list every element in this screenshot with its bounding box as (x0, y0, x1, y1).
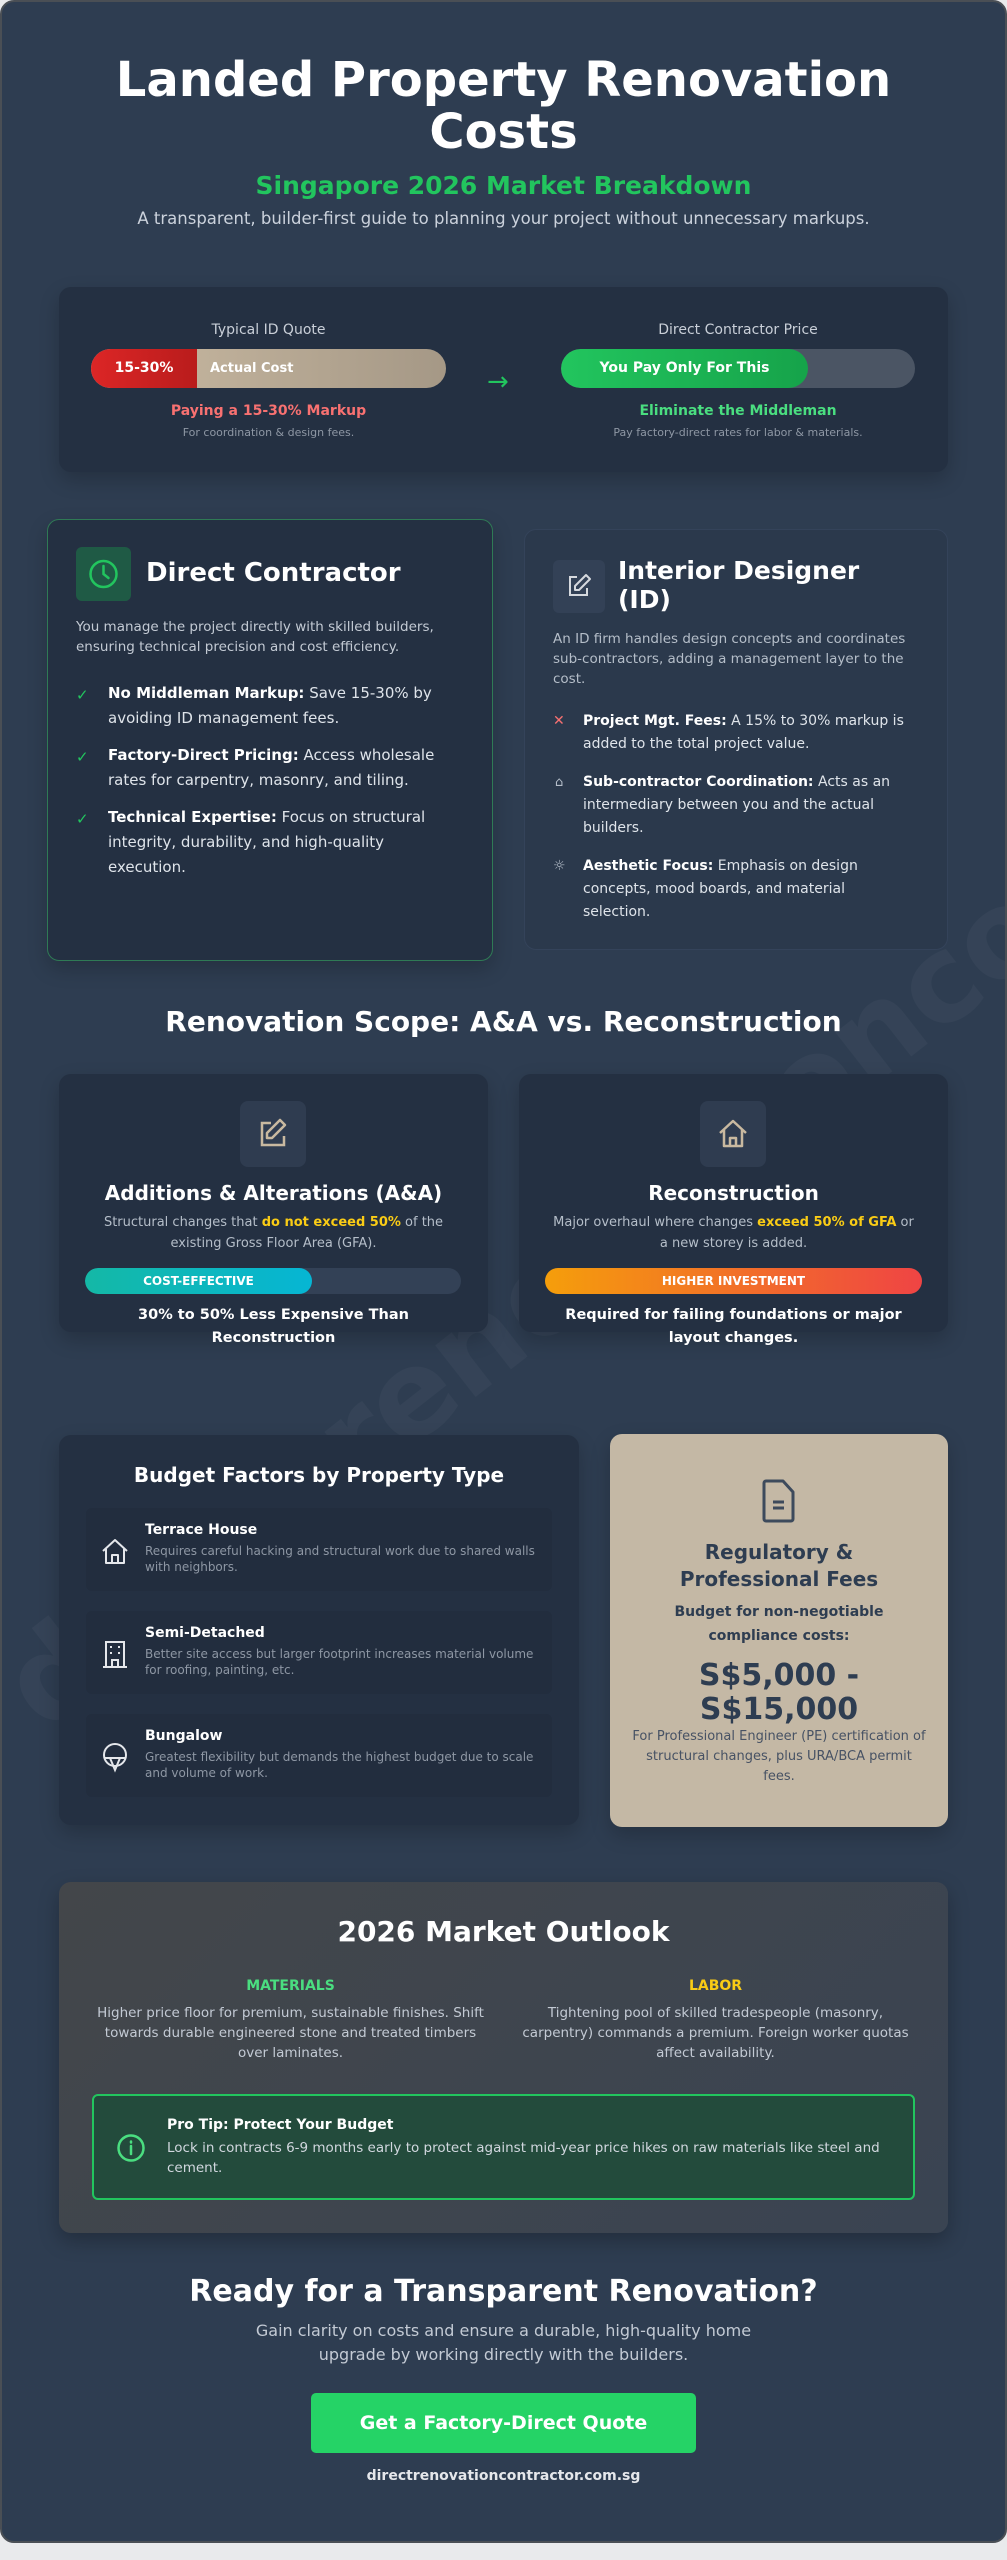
row: bungalow: Bungalow (145, 1728, 222, 1744)
website url: directrenovationcontractor.com.sg (367, 2468, 640, 2484)
icon: clock (76, 547, 131, 601)
heading: Professional Fees (680, 1567, 878, 1591)
icon: edit (240, 1101, 306, 1167)
list: benefits: ✓ (76, 748, 89, 766)
highlight: Required for failing foundations or major layout changes. (565, 1307, 902, 1346)
list: drawbacks: ✕ (553, 713, 565, 729)
icon: edit (553, 560, 605, 613)
price range: S$15,000 (700, 1692, 858, 1727)
title: Costs (429, 104, 578, 160)
panel: direct contractor (47, 519, 493, 961)
panel: interior designer (524, 529, 948, 950)
button: Get a Factory-Direct Quote (360, 2412, 647, 2434)
list: benefits: Factory-Direct Pricing: Access wholesale rates for carpentry, masonry, and tiling. (108, 746, 434, 789)
bar: cost effective (85, 1268, 461, 1294)
row: terrace: Requires careful hacking and structural work due to shared walls with neighbors. (145, 1544, 535, 1574)
markup label: Paying a 15-30% Markup (171, 403, 366, 419)
list: benefits: Technical Expertise: Focus on structural integrity, durability, and high-quality execution. (108, 808, 425, 876)
column: materials: MATERIALS (246, 1978, 335, 1994)
price range: S$5,000 - (699, 1658, 859, 1693)
list: benefits (76, 684, 434, 876)
row: bungalow: Greatest flexibility but demands the highest budget due to scale and volume of work. (145, 1750, 533, 1780)
label: direct price: Direct Contractor Price (658, 322, 818, 338)
panel: price comparison: For coordination & design fees. (183, 426, 354, 439)
panel: price comparison: Pay factory-direct rates for labor & materials. (613, 426, 863, 439)
description: Major overhaul where changes exceed 50% of GFA or a new storey is added. (553, 1215, 914, 1251)
list: benefits: No Middleman Markup: Save 15-30% by avoiding ID management fees. (108, 684, 432, 727)
list: benefits: ✓ (76, 686, 89, 704)
bar: higher investment: HIGHER INVESTMENT (662, 1274, 805, 1288)
bar: ID quote: Actual Cost (210, 361, 293, 376)
button (311, 2393, 696, 2453)
heading: (ID) (618, 585, 671, 614)
row: terrace: Terrace House (145, 1522, 257, 1538)
label: typical ID quote: Typical ID Quote (212, 322, 325, 338)
list: drawbacks: Sub-contractor Coordination: Acts as an intermediary between you and the actual builders. (583, 774, 890, 836)
price range (699, 1658, 859, 1727)
bar: ID quote: 15-30% (115, 360, 173, 376)
note: For Professional Engineer (PE) certification of structural changes, plus URA/BCA permit fees. (632, 1729, 926, 1784)
description: An ID firm handles design concepts and coordinates sub-contractors, adding a management layer to the cost. (553, 631, 905, 687)
row: bungalow (86, 1714, 552, 1797)
title: Reconstruction (648, 1181, 819, 1205)
list: drawbacks: ⌂ (555, 775, 563, 790)
heading: renovation scope: Renovation Scope: A&A vs. Reconstruction (165, 1005, 842, 1038)
panel: regulatory fees (610, 1434, 948, 1827)
row: semi-detached: Semi-Detached (145, 1625, 265, 1641)
highlight: 30% to 50% Less Expensive Than Reconstruction (138, 1307, 409, 1346)
bar: ID quote (91, 349, 446, 388)
heading (680, 1540, 878, 1591)
description: You manage the project directly with skilled builders, ensuring technical precision and cost efficiency. (76, 619, 434, 655)
CTA text: Gain clarity on costs and ensure a durable, high-quality home upgrade by working directly with the builders. (256, 2321, 751, 2364)
title: Additions & Alterations (A&A) (105, 1181, 442, 1205)
heading: 2026 Market Outlook (337, 1915, 670, 1948)
callout: pro tip (92, 2094, 915, 2200)
arrow: → (487, 367, 509, 397)
heading: Direct Contractor (146, 558, 401, 588)
CTA heading: Ready for a Transparent Renovation? (189, 2274, 818, 2309)
heading (618, 556, 860, 614)
list: drawbacks: ☼ (553, 858, 566, 874)
heading: Budget Factors by Property Type (134, 1463, 504, 1487)
subtitle: Budget for non-negotiable compliance costs: (675, 1604, 883, 1644)
panel: A&A (59, 1074, 488, 1332)
panel: reconstruction (519, 1074, 948, 1332)
title (116, 52, 891, 160)
list: drawbacks: Project Mgt. Fees: A 15% to 30% markup is added to the total project value. (583, 713, 904, 752)
bar: direct price (561, 349, 915, 388)
subtitle: Singapore 2026 Market Breakdown (256, 171, 751, 200)
bar: direct price: You Pay Only For This (600, 360, 769, 376)
icon: document (762, 1480, 794, 1522)
column: materials: Higher price floor for premium, sustainable finishes. Shift towards durable engineered stone and treated timbers over laminates. (97, 2005, 484, 2061)
column: labor: Tightening pool of skilled tradespeople (masonry, carpentry) commands a premium. Foreign worker quotas affect availability. (522, 2005, 909, 2061)
callout: pro tip: Lock in contracts 6-9 months early to protect against mid-year price hikes on raw materials like steel and cement. (167, 2140, 880, 2176)
callout: pro tip: Pro Tip: Protect Your Budget (167, 2117, 393, 2133)
bar: higher investment (545, 1268, 922, 1294)
list: drawbacks: Aesthetic Focus: Emphasis on design concepts, mood boards, and material selection. (583, 858, 858, 920)
row: terrace (86, 1508, 552, 1591)
eliminate label: Eliminate the Middleman (639, 403, 837, 419)
heading: Interior Designer (618, 556, 859, 585)
list: benefits: ✓ (76, 810, 89, 828)
column: labor (522, 1978, 909, 2061)
heading: Regulatory & (705, 1540, 853, 1564)
intro text: A transparent, builder-first guide to planning your project without unnecessary markups. (137, 209, 870, 228)
icon: house (700, 1101, 766, 1167)
title: Landed Property Renovation (116, 52, 891, 108)
panel: budget factors (59, 1435, 579, 1825)
panel: price comparison (59, 287, 948, 472)
column: labor: LABOR (689, 1978, 742, 1994)
row: semi-detached: Better site access but larger footprint increases material volume for roofing, painting, etc. (145, 1647, 533, 1677)
list: drawbacks (553, 713, 904, 920)
bar: cost effective: COST-EFFECTIVE (143, 1274, 254, 1288)
column: materials (97, 1978, 484, 2061)
description: Structural changes that do not exceed 50% of the existing Gross Floor Area (GFA). (104, 1215, 443, 1251)
panel: market outlook (59, 1882, 948, 2233)
row: semi-detached (86, 1611, 552, 1694)
